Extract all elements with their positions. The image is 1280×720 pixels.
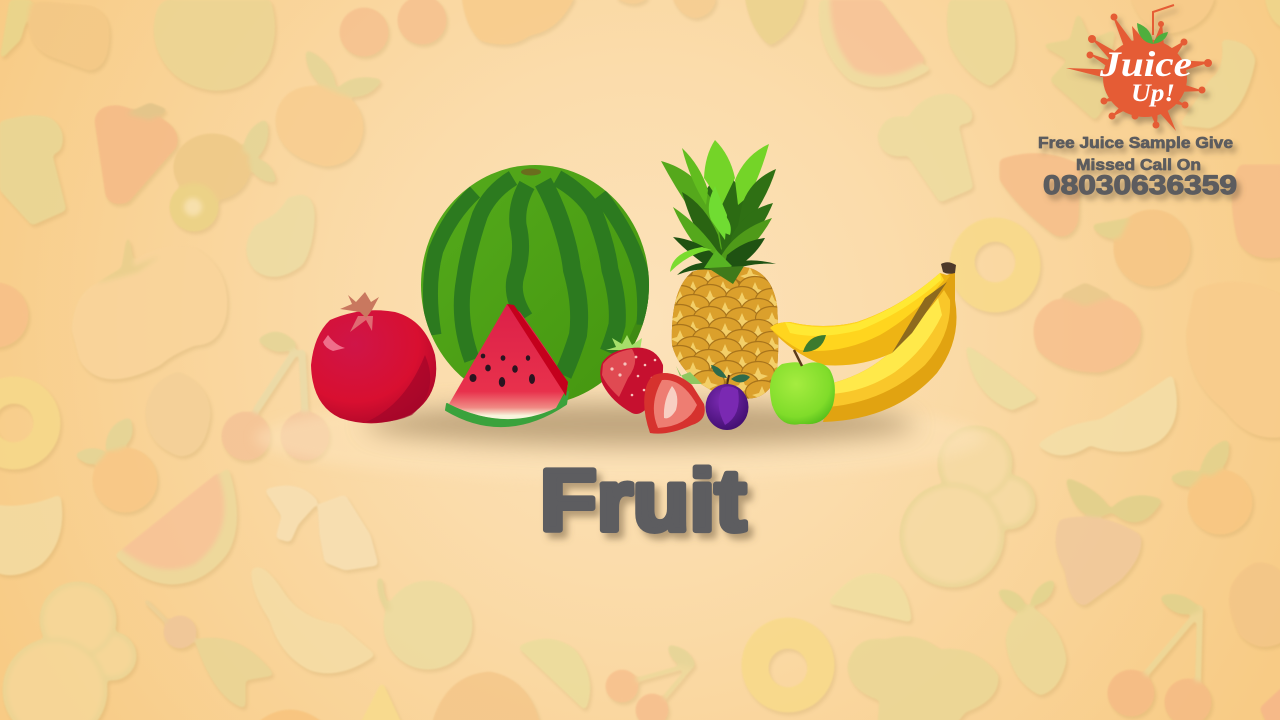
icon: half strawberry <box>644 366 705 434</box>
faded pumpkin right <box>1187 282 1280 437</box>
faded pumpkin left <box>72 232 227 379</box>
faded lime wedge centre <box>966 345 1038 410</box>
logo: Juice Up splash: Up! <box>1131 80 1175 107</box>
leaf <box>1137 23 1168 44</box>
faded lemon top right <box>948 0 1015 86</box>
faded pear behind logo <box>1180 40 1255 128</box>
faded citrus circles left <box>5 584 134 720</box>
icon: whole strawberry <box>600 335 663 414</box>
faded cherries top <box>340 0 446 56</box>
faded pineapple ring bottom <box>742 618 834 712</box>
lower banana <box>823 272 957 422</box>
faded strawberry left <box>95 103 177 203</box>
callout: free juice sample text <box>1038 135 1237 200</box>
faded tomato right <box>1034 283 1140 372</box>
icon: watermelon slice <box>446 304 568 426</box>
faded citrus circles right <box>902 428 1033 585</box>
faded broccoli top right <box>878 94 973 202</box>
faded half pear left <box>0 495 62 575</box>
faded orange right <box>1170 440 1252 534</box>
faded pineapple ring left <box>0 377 60 469</box>
faded cherries bottom <box>606 645 695 720</box>
icon: apple <box>770 335 835 425</box>
splash shape <box>1066 14 1212 131</box>
faded half pear bottom <box>252 568 375 673</box>
upper banana <box>770 273 950 366</box>
faded melon bottom <box>380 578 472 669</box>
faded peach <box>276 50 382 166</box>
icon: pomegranate <box>311 292 436 423</box>
faded lemon <box>146 372 210 456</box>
faded cherries right <box>1108 594 1211 720</box>
faded cherries centre <box>222 332 329 460</box>
logo text: Juice <box>1099 44 1192 84</box>
faded pineapple top-left <box>0 0 109 70</box>
logo: Juice Up splash <box>1066 5 1212 131</box>
icon: plum <box>706 365 750 430</box>
faded broccoli bottom <box>848 637 998 720</box>
faded shapes along top <box>462 0 805 45</box>
faded lime wedge bottom <box>518 639 590 710</box>
faded lemon bottom centre-right <box>998 580 1066 695</box>
faded kiwi <box>170 120 276 231</box>
title: Fruit: Fruit <box>540 453 746 549</box>
faded lime wedge <box>828 574 911 622</box>
faded pineapple ring right <box>950 218 1040 312</box>
straw <box>1153 5 1174 35</box>
icon: watermelon <box>421 165 649 400</box>
callout: free juice sample text: Free Juice Sample Give <box>1038 135 1233 152</box>
callout: free juice sample text: 08030636359 <box>1043 170 1237 200</box>
faded pear left <box>247 195 314 276</box>
faded orange under text <box>1092 210 1190 286</box>
faded mushrooms <box>265 486 378 570</box>
pineapple crown <box>661 140 776 284</box>
faded half pear right <box>1038 375 1176 455</box>
faded broccoli left <box>0 116 66 225</box>
faded grapes <box>1056 478 1162 605</box>
faded orange top right <box>1130 0 1215 33</box>
icon: bananas <box>770 262 957 422</box>
callout: free juice sample text: Missed Call On <box>1076 157 1201 174</box>
ground shadow and stage <box>255 396 985 480</box>
faded watermelon slice <box>115 468 236 584</box>
faded plum with leaves <box>145 600 274 708</box>
faded strawberry behind text <box>1000 154 1080 236</box>
faded melon top <box>154 0 275 90</box>
faded watermelon top <box>819 0 932 87</box>
faded orange left edge <box>0 283 28 347</box>
faded orange slice bottom <box>255 710 325 720</box>
faded strawberry right edge <box>1232 165 1280 258</box>
faded watermelon bottom-right corner <box>1260 685 1280 720</box>
faded pineapple behind logo <box>1042 12 1130 120</box>
faded orange with leaves <box>75 418 157 512</box>
faded lemon bottom left <box>432 672 540 720</box>
icon: pineapple <box>661 140 788 404</box>
faded lemon right edge <box>1230 563 1280 646</box>
